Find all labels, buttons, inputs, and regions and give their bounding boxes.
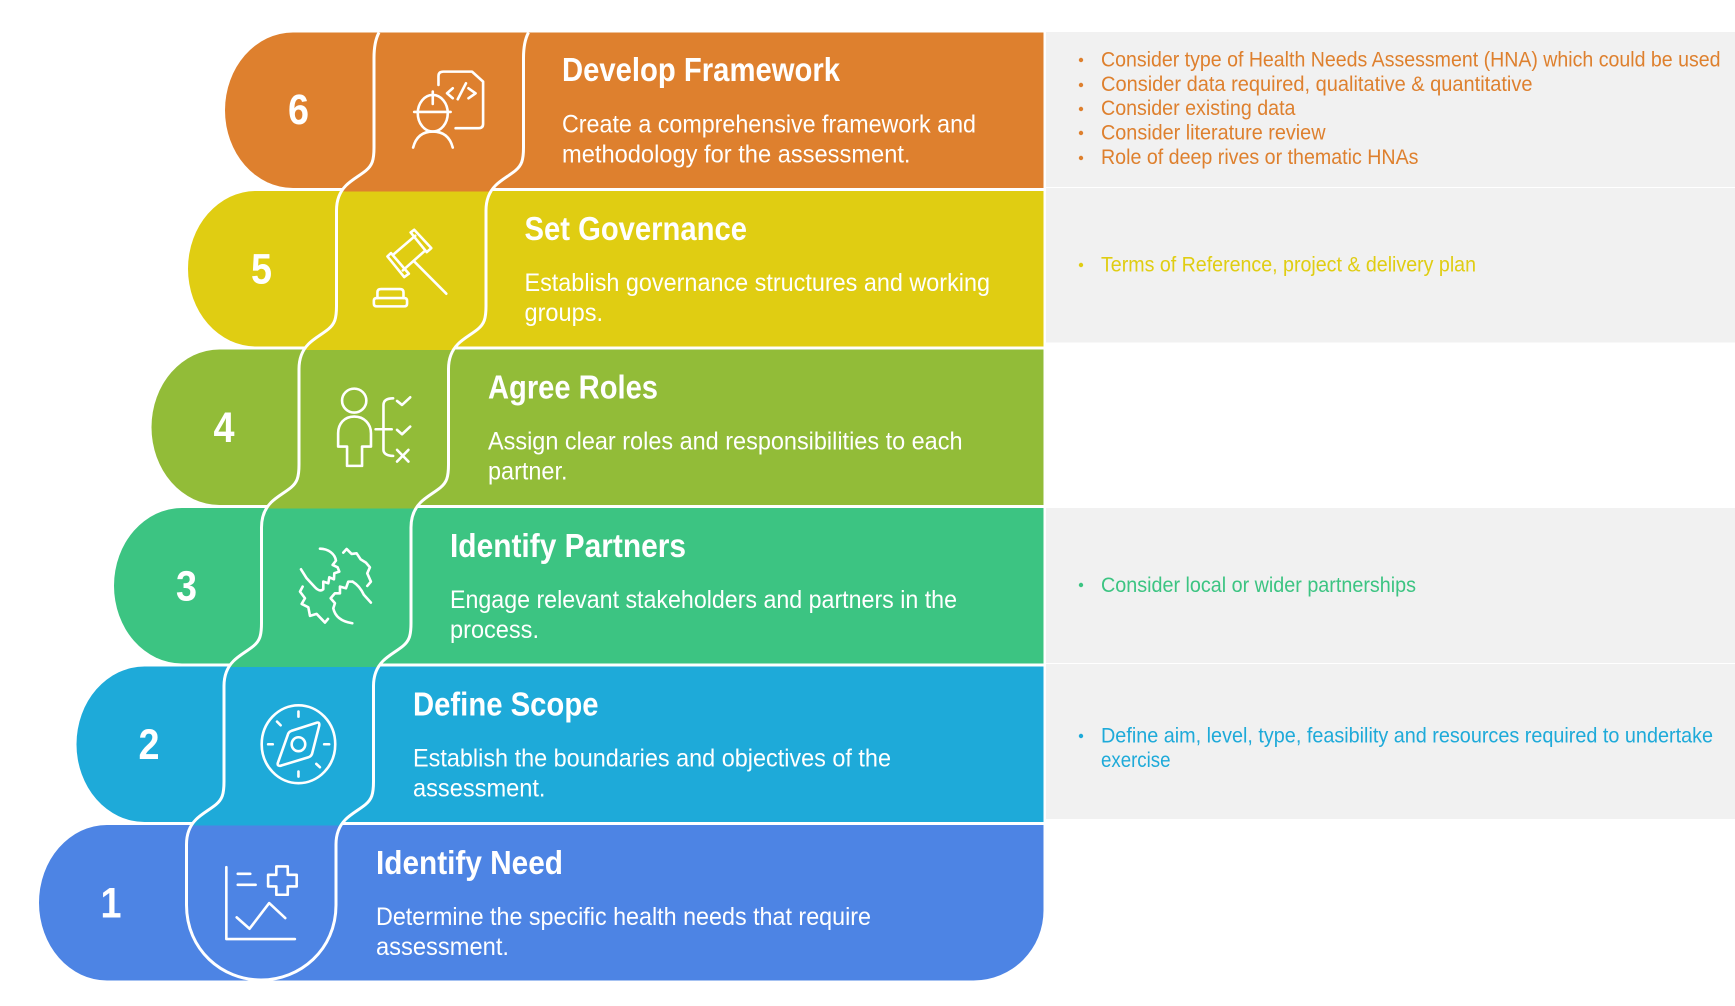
heading: Develop Framework: Develop Framework — [562, 51, 841, 88]
number 3: 3 — [176, 562, 197, 610]
description: step 5 — [524, 269, 990, 327]
number 2: 2 — [138, 721, 160, 769]
description: step 4 — [488, 428, 962, 486]
icon: chart with medical cross — [226, 866, 297, 939]
description: step 1: assessment. — [376, 933, 509, 961]
description: step 5: groups. — [524, 299, 603, 327]
panel: notes for step 6: Role of deep rives or thematic HNAs — [1101, 146, 1418, 169]
heading: Define Scope: Define Scope — [413, 686, 598, 722]
heading: Agree Roles: Agree Roles — [488, 368, 658, 406]
panel: notes for step 2: exercise — [1101, 749, 1170, 772]
panel: notes for step 2: Define aim, level, type, feasibility and resources required to undertake — [1101, 724, 1713, 748]
number 4: 4 — [214, 404, 235, 452]
number 5: 5 — [251, 246, 272, 294]
description: step 4: partner. — [488, 458, 568, 486]
number 6: 6 — [288, 86, 309, 134]
heading: Identify Partners: Identify Partners — [450, 527, 686, 564]
icon: handshake — [300, 549, 371, 623]
panel: notes for step 3: Consider local or wider partnerships — [1101, 574, 1416, 597]
step 3: Identify Partners — [114, 508, 1043, 686]
description: step 2 — [413, 744, 891, 802]
description: step 3 — [450, 586, 957, 644]
panel: notes for step 6: Consider data required, qualitative & quantitative — [1101, 73, 1532, 96]
icon: gavel — [374, 230, 446, 306]
step 1: Identify Need — [39, 825, 1044, 980]
description: step 1: Determine the specific health needs that require — [376, 903, 871, 931]
panel: notes for step 3 — [1046, 508, 1735, 663]
panel: notes for step 6 — [1046, 32, 1735, 187]
step 2: Define Scope — [76, 666, 1044, 844]
description: step 3: Engage relevant stakeholders and partners in the — [450, 586, 957, 614]
step 5: Set Governance — [188, 191, 1044, 369]
heading: Identify Need: Identify Need — [376, 844, 563, 881]
panel: notes for step 5: Terms of Reference, project & delivery plan — [1101, 254, 1476, 276]
icon: compass — [262, 705, 335, 783]
description: step 3: process. — [450, 616, 539, 644]
description: step 6: Create a comprehensive framework and — [562, 110, 976, 138]
description: step 4: Assign clear roles and responsibilities to each — [488, 428, 962, 456]
panel: notes for step 2 — [1046, 664, 1735, 819]
description: step 2: Establish the boundaries and objectives of the — [413, 744, 891, 772]
step 6: Develop Framework — [225, 32, 1044, 210]
icon: engineer with code document — [413, 72, 483, 148]
icon: person with checklist — [338, 389, 410, 466]
panel: notes for step 5 — [1046, 188, 1735, 342]
description: step 6 — [562, 110, 976, 168]
panel: notes for step 6: Consider literature review — [1101, 122, 1326, 144]
description: step 2: assessment. — [413, 774, 546, 802]
description: step 5: Establish governance structures and working — [524, 269, 990, 297]
description: step 6: methodology for the assessment. — [562, 140, 910, 168]
panel: notes for step 6: Consider existing data — [1101, 97, 1296, 120]
description: step 1 — [376, 903, 871, 961]
step 4: Agree Roles — [152, 350, 1044, 528]
number 1: 1 — [100, 880, 122, 928]
heading: Set Governance: Set Governance — [524, 210, 747, 247]
